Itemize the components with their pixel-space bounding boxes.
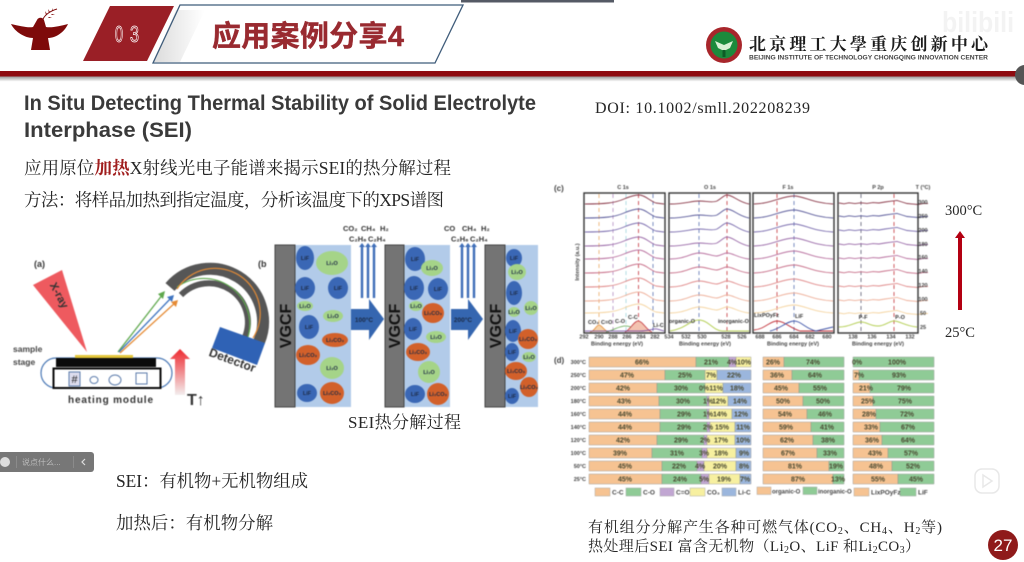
temperature row labels: 50°C — [574, 464, 586, 470]
panel: after 100°C: Li₂CO₃ — [429, 392, 448, 398]
sample stage and heating module: # — [71, 374, 78, 386]
gas release 1: C₂H₄ — [368, 234, 386, 244]
temperature axis labels: 25 — [920, 325, 926, 331]
value labels: F 1s: 57% — [904, 450, 919, 458]
spectra panel: O 1s: 530 — [697, 334, 707, 340]
spectra panel: F 1s: 686 — [772, 334, 782, 340]
conclusion text: 、CH — [844, 520, 881, 536]
value labels: C 1s: 8% — [739, 464, 750, 470]
value labels: F 1s: 7% — [854, 372, 865, 380]
gas release 1: CH₄ — [361, 224, 376, 233]
figure c: XPS spectra: Intensity (a.u.) — [575, 243, 581, 281]
spectra panel: F 1s: 688 — [755, 334, 765, 340]
legend: C 1s: C=O — [676, 490, 690, 496]
value labels: C 1s: 31% — [670, 450, 685, 458]
conclusion text: 热处理后SEI 富含无机物（Li — [588, 539, 784, 555]
value labels: C 1s: 21% — [704, 360, 719, 366]
temperature axis labels: 200 — [918, 228, 928, 234]
value labels: C 1s: 22% — [672, 464, 687, 470]
value labels: C 1s: 12% — [734, 412, 749, 418]
arrow: 200°C step: 200°C — [454, 316, 472, 324]
value labels: C 1s: 1% — [703, 412, 714, 418]
value labels: F 1s: 100% — [888, 360, 907, 366]
stacked bars: O 1s — [763, 357, 844, 484]
value labels: C 1s: 9% — [739, 450, 750, 458]
value labels: F 1s: 21% — [859, 386, 874, 392]
institution logo: BEIJING INSTITUTE OF TECHNOLOGY CHONGQING INNOVATION CENTER — [749, 54, 988, 62]
value labels: C 1s: 14% — [733, 398, 748, 406]
spectra panel: O 1s: Binding energy (eV) — [679, 342, 731, 348]
value labels: O 1s: 41% — [820, 424, 835, 432]
figure c: XPS spectra: (c) — [554, 184, 564, 193]
value labels: C 1s: 18% — [730, 386, 745, 392]
value labels: O 1s: 54% — [778, 412, 793, 418]
panel: after 200°C: LiF — [510, 291, 519, 297]
spectra panel: O 1s: 532 — [681, 334, 691, 340]
spectra panel: C 1s: 286 — [622, 334, 632, 340]
value labels: F 1s: 48% — [869, 464, 884, 470]
arrow: temperature rising — [170, 349, 205, 409]
temperature row labels: 250°C — [571, 373, 586, 379]
value labels: F 1s: 55% — [871, 476, 886, 484]
logo: eagle — [11, 8, 68, 50]
text: SEI composition: SEI：有机物+无机物组成 — [116, 471, 308, 491]
value labels: O 1s: 38% — [821, 438, 836, 444]
gas release 2 — [444, 224, 490, 298]
conclusion text: 2 — [838, 526, 843, 537]
panel: after 100°C: Li₂O — [410, 304, 423, 310]
value labels: F 1s: 43% — [868, 450, 883, 458]
page number badge — [988, 530, 1018, 560]
player control at right edge — [1015, 65, 1024, 85]
value labels: O 1s: 33% — [823, 450, 838, 458]
value labels: C 1s: 5% — [699, 476, 710, 484]
value labels: O 1s: 19% — [829, 464, 844, 470]
panel: after 100°C: LiF — [411, 392, 420, 398]
value labels: C 1s: 10% — [736, 438, 751, 444]
spectra panel: P 2p: P 2p — [872, 185, 884, 191]
label: 300°C: 300°C — [945, 203, 982, 219]
panel: initial state: Li₂O — [326, 261, 339, 267]
panel: after 100°C: Li₂O — [423, 370, 436, 376]
arrow: 100°C step — [351, 299, 384, 340]
legend: C 1s — [595, 488, 751, 496]
panel: after 200°C: VGCF — [488, 304, 505, 348]
value labels: C 1s: 45% — [618, 476, 633, 484]
temperature axis labels: 120 — [918, 283, 928, 289]
value labels: C 1s: 66% — [635, 360, 650, 366]
sample stage and heating module: sample — [13, 344, 43, 354]
conclusion text: 2 — [784, 545, 789, 556]
label: 25°C: 25°C — [945, 325, 975, 341]
figure b: SEI decomposition — [258, 224, 539, 407]
value labels: O 1s: 74% — [806, 360, 821, 366]
spectra panel: O 1s: inorganic-O — [718, 319, 750, 325]
panel: after 100°C — [385, 245, 450, 407]
caption: SEI decomposition: SEI热分解过程 — [348, 413, 461, 432]
value labels: F 1s: 45% — [909, 476, 924, 484]
value labels: F 1s: 36% — [865, 438, 880, 444]
conclusion text: CO — [878, 539, 899, 555]
value labels: C 1s: 14% — [713, 412, 728, 418]
panel: initial state: LiF — [305, 325, 314, 331]
arrow: temperature scale — [955, 231, 965, 310]
spectra panel: F 1s: 684 — [789, 334, 800, 340]
legend: F 1s: LixPOyFz — [871, 490, 901, 496]
temperature axis labels: 100 — [918, 297, 928, 303]
heading: Interphase (SEI) — [24, 119, 192, 142]
arrow: 100°C step: 100°C — [355, 316, 373, 324]
value labels: C 1s: 11% — [736, 424, 751, 432]
spectra panel: F 1s — [753, 185, 834, 348]
value labels: C 1s: 24% — [673, 476, 688, 484]
value labels: C 1s: 29% — [674, 438, 689, 444]
value labels: C 1s: 42% — [616, 386, 631, 392]
panel: after 200°C: Li₂O — [523, 355, 536, 361]
page number badge: 27 — [994, 536, 1012, 555]
conclusion text — [588, 519, 942, 556]
value labels: C 1s: 42% — [616, 438, 631, 444]
panel: after 200°C: Li₂CO₃ — [507, 369, 526, 375]
spectra panel: F 1s: LixPOyFz — [754, 313, 779, 319]
value labels: C 1s: 2% — [703, 424, 714, 432]
spectra panel: F 1s: Binding energy (eV) — [767, 342, 819, 348]
value labels: O 1s: 36% — [770, 372, 785, 380]
spectra panel: P 2p: 134 — [886, 334, 897, 340]
panel: initial state — [275, 245, 351, 407]
value labels: O 1s: 81% — [788, 464, 803, 470]
spectra panel: C 1s: 292 — [579, 334, 589, 340]
watermark: bilibili: bilibili — [942, 7, 1014, 39]
figure a: XPS setup: (a) — [34, 259, 45, 269]
temperature axis labels: 140 — [918, 269, 928, 275]
panel: initial state: Li₂O — [299, 304, 312, 310]
spectra panel: C 1s: 284 — [636, 334, 647, 340]
gas release 1 — [343, 224, 389, 298]
section number badge: 0 — [115, 21, 123, 47]
value labels: C 1s: 44% — [618, 424, 633, 432]
value labels: C 1s: 4% — [727, 360, 738, 366]
value labels: F 1s: 0% — [852, 360, 863, 366]
conclusion text: O、LiF 和Li — [789, 538, 872, 555]
panel: initial state: LiF — [301, 256, 310, 262]
value labels: C 1s: 18% — [714, 450, 729, 458]
icon: x-ray cone: X-ray — [47, 281, 71, 311]
value labels: C 1s: 29% — [677, 424, 692, 432]
spectra panel: C 1s: C-O — [615, 319, 626, 325]
value labels: C 1s: 4% — [695, 464, 706, 470]
DOI: DOI: 10.1002/smll.202208239 — [595, 100, 810, 117]
temperature row labels: 140°C — [571, 425, 586, 431]
value labels: O 1s: 62% — [780, 438, 795, 444]
value labels: C 1s: 44% — [618, 412, 633, 418]
gas release 1: H₂ — [380, 224, 389, 233]
value labels: O 1s: 26% — [766, 360, 781, 366]
value labels: C 1s: 11% — [709, 386, 724, 392]
value labels: O 1s: 67% — [781, 450, 796, 458]
value labels: O 1s: 46% — [818, 412, 833, 418]
panel: initial state: Li₂CO₃ — [299, 353, 318, 359]
institution logo: 北京理工大學重庆创新中心 — [749, 30, 990, 55]
value labels: O 1s: 50% — [776, 398, 791, 406]
conclusion text: ） — [905, 538, 920, 555]
value labels: C 1s: 19% — [717, 476, 732, 484]
section title box: 应用案例分享4 — [212, 20, 404, 53]
panel: after 100°C: LiF — [409, 327, 418, 333]
gas release 2: H₂ — [481, 224, 490, 233]
panel: initial state: Li₂O — [326, 366, 339, 372]
panel: after 100°C: Li₂O — [430, 335, 443, 341]
gas release 2: CO — [444, 224, 455, 233]
panel: initial state: Li₂O — [327, 314, 340, 320]
value labels: F 1s: 93% — [892, 372, 907, 380]
value labels: F 1s: 64% — [901, 438, 916, 444]
spectra panel: C 1s: 282 — [650, 334, 660, 340]
panel: after 200°C: LiF — [508, 350, 517, 356]
value labels: C 1s: 29% — [677, 412, 692, 418]
panel: after 100°C: LiF — [434, 287, 443, 293]
value labels: C 1s: 0% — [699, 386, 710, 392]
value labels: O 1s: 50% — [816, 398, 831, 406]
spectra panel: F 1s: LiF — [795, 314, 804, 320]
heading: In Situ Detecting Thermal Stability of Solid Electrolyte — [24, 92, 536, 115]
gas release 1: CO₂ — [343, 224, 358, 233]
conclusion text: 有机组分分解产生各种可燃气体(CO — [588, 520, 837, 536]
value labels: C 1s: 10% — [737, 360, 752, 366]
panel: after 200°C: Li₂O — [508, 310, 521, 316]
section number badge: 3 — [130, 21, 139, 47]
value labels: F 1s: 67% — [901, 424, 916, 432]
value labels: C 1s: 25% — [678, 372, 693, 380]
value labels: C 1s: 43% — [617, 398, 632, 406]
panel: after 200°C: Li₂CO₃ — [520, 385, 539, 391]
icon: video button — [975, 469, 999, 493]
arrow: temperature rising: T↑ — [187, 392, 205, 409]
spectra panel: P 2p: P-F — [859, 315, 868, 321]
spectra panel: C 1s: Binding energy (eV) — [591, 342, 643, 348]
temperature row labels: 160°C — [571, 412, 586, 418]
spectra panel: P 2p: P-O — [895, 315, 906, 321]
panel: after 200°C: LiF — [508, 394, 517, 400]
spectra panel: O 1s: 534 — [664, 334, 675, 340]
value labels: C 1s: 3% — [699, 450, 710, 458]
chat input widget — [0, 452, 94, 472]
text: application: 应用原位加热X射线光电子能谱来揭示SEI的热分解过程 — [24, 158, 452, 178]
gas release 2: C₂H₆ — [451, 234, 469, 244]
panel: after 100°C: Li₂CO₃ — [424, 311, 443, 317]
legend: F 1s — [854, 488, 928, 496]
header rule — [0, 71, 1024, 82]
icon: x-ray cone — [33, 270, 87, 352]
temperature axis labels: 250 — [918, 214, 928, 220]
conclusion text: 2 — [873, 545, 878, 556]
temperature axis labels: 300 — [918, 200, 928, 206]
spectra panel: O 1s — [664, 185, 750, 348]
temperature axis labels: 50 — [920, 311, 926, 317]
value labels: O 1s: 64% — [808, 372, 823, 380]
panel: after 100°C: Li₂O — [426, 266, 439, 272]
spectra panel: P 2p: Binding energy (eV) — [852, 342, 904, 348]
conclusion text: 、H — [888, 520, 915, 536]
figure d: composition bars — [554, 356, 934, 496]
temperature row labels: 25°C — [574, 477, 586, 483]
figure d: composition bars: (d) — [554, 356, 565, 365]
spectra panel: P 2p — [838, 185, 928, 348]
value labels: O 1s: 55% — [813, 386, 828, 392]
value labels: O 1s — [766, 360, 846, 484]
chat input widget: 说点什么... — [22, 457, 61, 467]
value labels: F 1s: 28% — [862, 412, 877, 418]
value labels: O 1s: 87% — [791, 476, 806, 484]
temperature row labels: 300°C — [571, 360, 586, 366]
temperature row labels: 200°C — [571, 386, 586, 392]
figure b: SEI decomposition: (b — [258, 259, 267, 269]
panel: initial state: LiF — [303, 391, 312, 397]
stacked bars: F 1s — [853, 357, 934, 484]
spectra panel: C 1s: C=O — [601, 320, 613, 326]
spectra panel: C 1s: Li-C — [653, 323, 664, 329]
gas release 1: C₂H₆ — [349, 234, 367, 244]
sample stage and heating module: heating module — [68, 395, 153, 406]
value labels: C 1s: 20% — [713, 464, 728, 470]
detector — [207, 327, 265, 375]
spectra panel: C 1s: C-C — [628, 315, 638, 321]
value labels: O 1s: 45% — [774, 386, 789, 392]
spectra panel: F 1s: 680 — [822, 334, 832, 340]
spectra panel: F 1s: 682 — [805, 334, 815, 340]
temperature axis labels: 160 — [918, 255, 928, 261]
panel: after 200°C: Li₂O — [511, 270, 524, 276]
value labels: C 1s: 7% — [740, 476, 751, 484]
value labels: F 1s: 75% — [898, 398, 913, 406]
spectra panel: P 2p: 136 — [867, 334, 877, 340]
value labels: C 1s: 15% — [715, 424, 730, 432]
spectra panel: F 1s: F 1s — [782, 185, 794, 191]
spectra panel: C 1s: C 1s — [617, 185, 629, 191]
panel: after 100°C: Li₂CO₃ — [409, 350, 428, 356]
legend: O 1s — [757, 487, 852, 496]
top bar fragment — [461, 0, 614, 2]
legend: C 1s: Li-C — [738, 490, 751, 496]
temperature axis labels — [916, 185, 931, 331]
value labels: F 1s: 72% — [900, 412, 915, 418]
temperature row labels: 180°C — [571, 399, 586, 405]
temperature axis labels: 180 — [918, 242, 928, 248]
conclusion text: 2 — [915, 526, 920, 537]
panel: after 100°C: VGCF — [387, 304, 404, 348]
temperature axis labels: T (°C) — [916, 185, 931, 191]
value labels: C 1s: 45% — [618, 464, 633, 470]
panel: after 100°C: LiF — [410, 286, 419, 292]
panel: initial state: LiF — [334, 286, 343, 292]
panel: after 200°C: LiF — [510, 256, 519, 262]
text: method: 方法：将样品加热到指定温度，分析该温度下的XPS谱图 — [24, 190, 444, 210]
panel: after 200°C — [485, 245, 539, 407]
detector: Detector — [207, 345, 258, 375]
text: after heating: 加热后：有机物分解 — [116, 513, 274, 533]
value labels: C 1s — [613, 360, 752, 484]
spectra panel: O 1s: O 1s — [704, 185, 716, 191]
value labels: F 1s — [852, 360, 924, 484]
spectra panel: C 1s — [579, 185, 665, 348]
value labels: C 1s: 39% — [613, 450, 628, 458]
sample stage and heating module — [13, 344, 172, 406]
figure a: XPS setup — [13, 259, 265, 409]
panel: after 200°C: Li₂CO₃ — [519, 337, 538, 343]
panel: after 200°C: LiF — [509, 329, 518, 335]
heading — [24, 92, 536, 142]
analyzer arc — [170, 268, 263, 342]
spectra panel: C 1s: 288 — [608, 334, 618, 340]
value labels: C 1s: 30% — [674, 386, 689, 392]
legend: O 1s: organic-O — [772, 490, 801, 496]
spectra panel: O 1s: organic-O — [669, 319, 696, 325]
value labels: O 1s: 13% — [831, 476, 846, 484]
value labels: C 1s: 30% — [676, 398, 691, 406]
value labels: C 1s: 7% — [706, 372, 717, 380]
spectra panel: O 1s: 528 — [721, 334, 731, 340]
section number badge — [83, 6, 174, 61]
figure c: XPS spectra — [554, 184, 931, 348]
value labels: C 1s: 22% — [727, 372, 742, 380]
value labels: C 1s: 12% — [712, 398, 727, 406]
temperature row labels — [571, 360, 586, 483]
legend: F 1s: LiF — [918, 490, 928, 496]
legend: O 1s: inorganic-O — [818, 490, 852, 496]
spectra panel: O 1s: 526 — [737, 334, 747, 340]
value labels: C 1s: 17% — [714, 438, 729, 444]
panel: initial state: Li₂CO₃ — [326, 338, 345, 344]
value labels: F 1s: 25% — [861, 398, 876, 406]
spectra panel: C 1s: CO₃ — [588, 320, 599, 326]
legend: C 1s: CO₃ — [707, 490, 720, 496]
sample stage and heating module: stage — [13, 357, 35, 367]
legend: C 1s: C-C — [612, 490, 624, 496]
panel: initial state: Li₂CO₃ — [323, 391, 342, 397]
conclusion text: 4 — [882, 526, 887, 537]
value labels: C 1s: 2% — [700, 438, 711, 444]
conclusion text: 3 — [900, 545, 905, 556]
temperature row labels: 100°C — [571, 451, 586, 457]
spectra panel: P 2p: 132 — [905, 334, 915, 340]
panel: after 200°C: Li₂O — [525, 306, 538, 312]
arrows: photoelectrons — [118, 291, 178, 353]
gas release 2: C₂H₄ — [470, 234, 488, 244]
value labels: O 1s: 59% — [779, 424, 794, 432]
spectra panel: C 1s: 290 — [594, 334, 604, 340]
temperature row labels: 120°C — [571, 438, 586, 444]
institution logo — [706, 27, 990, 63]
panel: initial state: VGCF — [278, 304, 295, 348]
stacked bars: C 1s — [589, 357, 751, 484]
value labels: F 1s: 79% — [897, 386, 912, 392]
panel: after 100°C: LiF — [411, 257, 420, 263]
value labels: F 1s: 52% — [906, 464, 921, 470]
legend: C 1s: C-O — [643, 490, 655, 496]
value labels: F 1s: 33% — [864, 424, 879, 432]
value labels: C 1s: 1% — [703, 398, 714, 406]
panel: initial state: LiF — [301, 286, 310, 292]
value labels: C 1s: 47% — [620, 372, 635, 380]
gas release 2: CH₄ — [462, 224, 477, 233]
section title box — [153, 5, 463, 63]
spectra panel: P 2p: 138 — [848, 334, 858, 340]
conclusion text: 等) — [921, 519, 942, 536]
arrow: 200°C step — [451, 299, 483, 340]
